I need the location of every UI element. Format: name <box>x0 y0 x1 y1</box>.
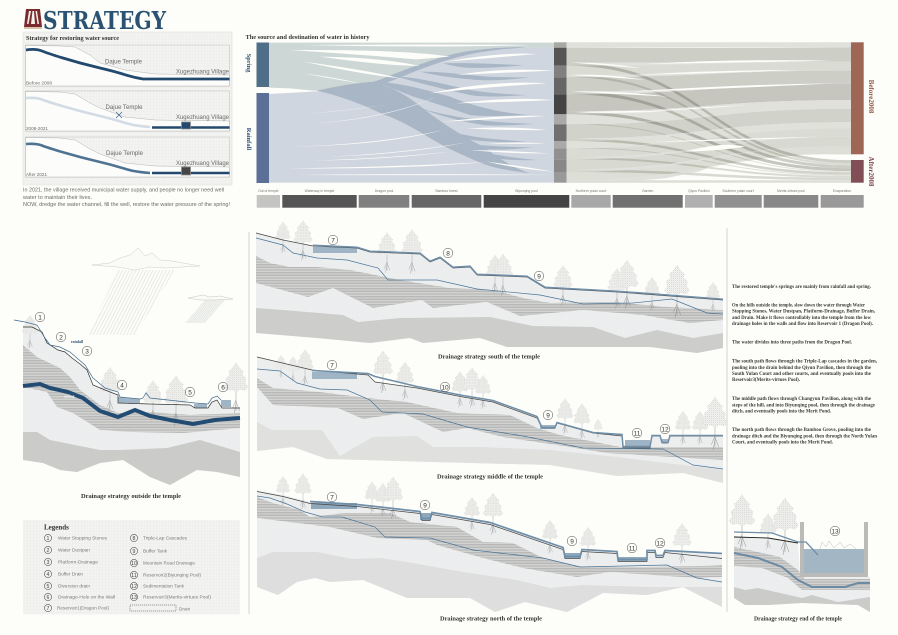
pools: reservoirs and tanks <box>312 372 668 448</box>
text block: explanation of restored water routes: The water divides into three paths from the Dragon Pool. <box>732 341 852 346</box>
flow gaps: right field <box>565 47 851 160</box>
legend heading: Legends <box>44 524 69 532</box>
profile: after 2021: Dajue Temple <box>106 151 144 157</box>
profile: before 2008: Dajue Temple <box>105 60 143 66</box>
profile: before 2008 <box>26 45 230 86</box>
numbered marker 13 <box>830 526 840 536</box>
water channels <box>734 532 870 587</box>
nodes: pool column <box>554 42 566 183</box>
caption: Drainage strategy middle of the temple <box>437 474 543 480</box>
flow gaps: left field <box>290 44 553 175</box>
icon: temple gate <box>24 9 42 29</box>
legend column one: Drainage-Hole on the Wall <box>58 594 115 600</box>
numbered markers: 7 <box>330 362 334 369</box>
profile: 2008-2021: 2008-2021 <box>26 126 48 131</box>
caption: Drainage strategy south of the temple <box>438 354 540 360</box>
chart: sankey source and destination of water <box>245 34 875 208</box>
caption: Drainage strategy end of the temple <box>754 616 842 622</box>
section: drainage strategy outside the temple <box>14 248 248 500</box>
section: drainage strategy end of the temple <box>729 495 870 622</box>
numbered markers 1 to 6: 2 <box>59 334 63 341</box>
legend column one: Platform-Drainage <box>58 560 98 564</box>
legend bar: water stages: Garden <box>642 189 653 193</box>
terrain layers <box>256 233 723 353</box>
legend column two: Reservoir3(Merits-virtues Pool) <box>143 594 211 600</box>
numbered markers: 7 <box>330 494 334 501</box>
profile: before 2008: Xugezhuang Village <box>176 70 230 76</box>
node: spring: Spring <box>245 54 252 73</box>
water channel and drain <box>257 357 723 469</box>
legend column two: 10 <box>131 561 137 567</box>
node: before 2008 <box>851 42 875 154</box>
numbered markers <box>327 492 665 553</box>
node: after 2008: After2008 <box>867 157 875 187</box>
text block: explanation of restored water routes: South Yulan Court and other courts, and eventually pools into the <box>732 372 871 377</box>
node: spring <box>245 42 269 87</box>
numbered markers 1 to 6 <box>35 312 228 397</box>
legend column one: 7 <box>47 606 50 612</box>
labels: rainfall and spring <box>64 340 83 398</box>
legend bar: water stages: Evaporation <box>833 189 851 193</box>
legend column one: Reservoir1(Dragon Pool) <box>57 606 109 610</box>
text block: explanation of restored water routes: steps of the hill, and into Biyunqing pool, then through the drainage <box>732 403 875 408</box>
legend column one: 2 <box>47 548 50 554</box>
trees <box>276 221 720 318</box>
text block: restoring water source note <box>23 188 230 208</box>
numbered markers: 9 <box>537 273 541 280</box>
flows: pools to after 2008 <box>566 63 851 183</box>
numbered markers: 9 <box>570 538 574 545</box>
panel: strategy for restoring water source <box>23 32 232 185</box>
legend bar: water stages: Merits-virtues pool <box>777 189 805 193</box>
labels: rainfall and spring: spring <box>64 394 74 398</box>
legend column one: Diversion drain <box>58 584 90 588</box>
trees <box>22 315 248 426</box>
legend bar: water stages: Waterway in temple <box>305 189 334 193</box>
legend column two: Mountain Road Drainage <box>143 560 195 566</box>
numbered markers: 11 <box>634 430 641 437</box>
text block: explanation of restored water routes: and Drain. Make it flows controllably into the temple from the low <box>732 316 872 321</box>
trees <box>276 474 692 563</box>
text block: explanation of restored water routes: The north path flows through the Bamboo Grove, pooling into the <box>732 428 871 433</box>
legend column two: Drain <box>179 606 191 612</box>
trees <box>276 350 728 450</box>
panel heading: Strategy for restoring water source <box>26 35 119 42</box>
flow fill: right field <box>565 42 851 183</box>
section: drainage strategy north of the temple <box>257 474 722 622</box>
water channel and drain <box>257 492 722 582</box>
section: drainage strategy middle of the temple <box>257 350 728 483</box>
profile: after 2021: After 2021 <box>26 172 48 177</box>
text block: explanation of restored water routes: On the hills outside the temple, slow down the water through Water <box>732 304 865 308</box>
node: before 2008: Before2008 <box>867 80 875 114</box>
numbered markers 1 to 6: 5 <box>188 389 192 396</box>
legend bar: water stages: Bamboo forest <box>435 189 458 193</box>
node: rainfall <box>245 93 269 183</box>
legend column two: 8 <box>133 536 136 542</box>
legend column one: Buffer Drain <box>58 572 83 576</box>
legend bar: water stages: Dragon pool <box>375 189 393 193</box>
legend column one: 4 <box>47 572 50 578</box>
text block: explanation of restored water routes: drainage ditch and the Biyunqing pool, then through the North Yulan <box>732 434 877 439</box>
text block: restoring water source note: water to maintain their lives. <box>23 195 92 201</box>
profile: before 2008: Before 2008 <box>26 80 53 86</box>
profile: 2008-2021 <box>26 91 230 131</box>
numbered markers: 10 <box>441 384 449 391</box>
legend bar: water stages: Biyunqing pool <box>515 189 538 193</box>
numbered markers 1 to 6: 1 <box>38 314 42 321</box>
legend column one: Water Dustpan <box>58 548 90 552</box>
pools: reservoirs and tanks <box>311 503 647 561</box>
legend column two: 12 <box>131 584 137 590</box>
numbered markers <box>327 360 670 438</box>
numbered marker 13: 13 <box>831 528 839 535</box>
numbered markers: 12 <box>656 540 664 547</box>
section: drainage strategy south of the temple <box>256 221 723 360</box>
text block: explanation of restored water routes: The south path flows through the Triple-Lap cascades in the garden, <box>732 360 877 365</box>
legend column two: Triple-Lap Cascades <box>143 536 188 540</box>
profile: 2008-2021: Xugezhuang Village <box>176 115 230 121</box>
legend column one: Water Stopping Stones <box>58 536 108 540</box>
chart heading: The source and destination of water in history <box>246 34 370 41</box>
legend column one <box>44 534 115 612</box>
heading: STRATEGY <box>43 6 166 35</box>
terrain layers <box>734 536 870 612</box>
legend column two: Reservoir2(Biyunqing Pool) <box>143 572 201 578</box>
legend column two: 13 <box>131 595 137 601</box>
terrain layers <box>257 490 722 612</box>
numbered markers 1 to 6: 6 <box>221 384 225 391</box>
numbered markers: 8 <box>446 250 450 257</box>
text block: explanation of restored water routes: Reservoir3(Merits-virtues Pool). <box>732 378 800 383</box>
numbered markers: 11 <box>629 545 636 552</box>
numbered markers <box>328 235 544 281</box>
legend column two: Buffer Tank <box>143 548 168 554</box>
panel: legends <box>23 520 240 614</box>
text block: explanation of restored water routes: The restored temple's springs are mainly from rainfall and spring. <box>732 285 871 290</box>
numbered markers 1 to 6: 3 <box>85 348 89 355</box>
legend bar: water stages: Out of temple <box>258 189 279 193</box>
text block: explanation of restored water routes: ditch, and eventually pools into the Merit Pond. <box>732 409 831 414</box>
legend column two: 11 <box>131 573 137 579</box>
text block: restoring water source note: In 2021, the village received municipal water supply, and people no longer need well <box>23 188 224 194</box>
text block: explanation of restored water routes: The middle path flows through Changyun Pavilion, along with the <box>732 397 871 402</box>
drain lines and pools <box>14 320 240 424</box>
profile: 2008-2021: Dajue Temple <box>106 105 143 111</box>
numbered markers: 12 <box>661 426 669 433</box>
legend column one: 1 <box>47 536 50 542</box>
pool: dragon pool <box>313 247 357 253</box>
legend column two <box>130 534 211 612</box>
text block: restoring water source note: NOW, dredge the water channel, fill the well, restore the water pressure of the spring! <box>23 202 230 208</box>
legend bar: water stages: Southern yulan court <box>722 189 754 193</box>
legend column one: 3 <box>47 560 50 566</box>
node: rainfall: Rainfall <box>245 128 252 150</box>
legend column one: 6 <box>47 595 50 601</box>
terrain layers <box>23 327 240 485</box>
node: after 2008 <box>851 157 875 187</box>
text block: explanation of restored water routes: Stopping Stones, Water Dustpan, Platform-Drainage, Buffer Drain, <box>732 310 875 315</box>
text block: explanation of restored water routes: drainage holes in the walls and flow into Reservoir 1 (Dragon Pool). <box>732 322 873 327</box>
legend column two: Sedimentation Tank <box>143 584 185 588</box>
legend bar: water stages: Qiyun Pavilion <box>688 189 710 193</box>
cloud and rain <box>88 248 233 335</box>
labels: rainfall and spring: rainfall <box>71 340 83 344</box>
text block: explanation of restored water routes: Court, and eventually pools into the Merit Pond. <box>732 440 833 445</box>
flows: pools to before 2008 <box>566 42 851 180</box>
caption: Drainage strategy north of the temple <box>440 616 542 622</box>
text block: explanation of restored water routes: pooling into the drain behind the Qiyun Pavilion, then through the <box>732 366 871 371</box>
trees <box>729 495 798 555</box>
profile: after 2021: Xugezhuang Village <box>176 161 230 167</box>
water channel and drain <box>256 233 723 314</box>
numbered markers: 9 <box>423 502 427 509</box>
caption: Drainage strategy outside the temple <box>81 493 181 500</box>
numbered markers 1 to 6: 4 <box>120 382 124 389</box>
legend column one: 5 <box>47 584 50 590</box>
title: strategy with icon <box>24 6 166 35</box>
numbered markers: 9 <box>546 412 550 419</box>
legend column two: 9 <box>133 549 136 555</box>
legend bar: water stages <box>257 189 864 208</box>
numbered markers: 7 <box>331 237 335 244</box>
flows: left field, spring and rainfall to pools <box>269 43 554 183</box>
text block: explanation of restored water routes <box>732 285 877 445</box>
legend bar: water stages: Northern yulan court <box>576 189 606 193</box>
profile: after 2021 <box>26 137 230 177</box>
terrain layers <box>257 357 723 483</box>
pool: merits-virtues pool <box>800 522 868 577</box>
